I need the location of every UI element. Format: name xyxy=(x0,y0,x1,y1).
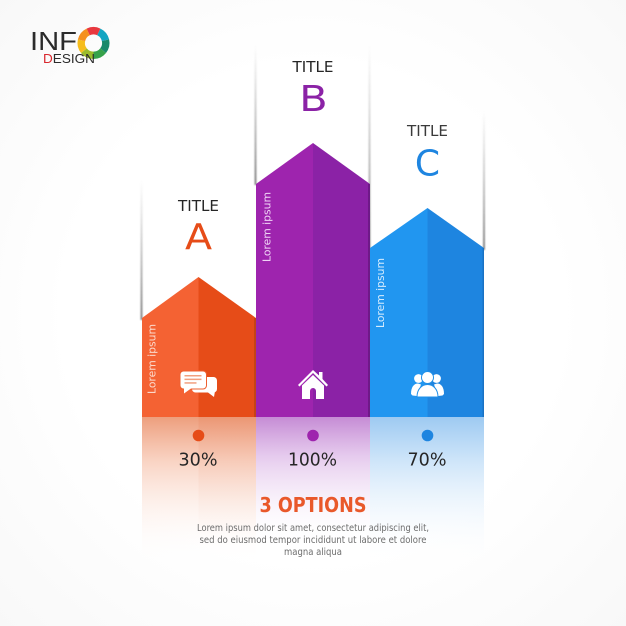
title C: TITLE xyxy=(406,122,448,140)
title C xyxy=(406,122,448,184)
logo text INF: INF xyxy=(30,26,77,56)
title B: TITLE xyxy=(291,58,334,76)
label: Lorem ipsum B: Lorem ipsum xyxy=(260,192,274,262)
letter B: B xyxy=(299,79,328,120)
icon: house xyxy=(298,370,328,399)
body text xyxy=(197,523,429,558)
marker dot C xyxy=(422,430,433,441)
logo xyxy=(30,26,106,66)
heading: 3 OPTIONS: 3 OPTIONS xyxy=(260,493,366,517)
title B xyxy=(291,58,334,120)
letter C: C xyxy=(415,144,440,184)
label: Lorem ipsum A: Lorem ipsum xyxy=(146,324,158,394)
arrow A xyxy=(142,277,256,417)
value 70%: 70% xyxy=(408,450,446,470)
logo ring xyxy=(81,31,106,55)
logo text DESIGN: DESIGN xyxy=(43,51,95,66)
title A xyxy=(177,197,219,258)
letter A: A xyxy=(185,216,212,258)
marker dot B xyxy=(307,430,319,441)
marker dot A xyxy=(193,430,204,441)
arrow C xyxy=(370,208,484,417)
label: Lorem ipsum C: Lorem ipsum xyxy=(374,258,387,328)
panel: reflections xyxy=(142,417,484,562)
value 100%: 100% xyxy=(288,450,337,470)
arrow B xyxy=(254,143,370,417)
body text: magna aliqua xyxy=(284,547,342,558)
panel: white columns xyxy=(140,45,485,320)
body text: sed do eiusmod tempor incididunt ut labore et dolore xyxy=(200,535,427,546)
icon: chat bubbles xyxy=(180,371,217,397)
title A: TITLE xyxy=(177,197,219,215)
body text: Lorem ipsum dolor sit amet, consectetur adipiscing elit, xyxy=(197,523,429,534)
icon: people group xyxy=(411,372,444,397)
value 30%: 30% xyxy=(178,450,218,470)
